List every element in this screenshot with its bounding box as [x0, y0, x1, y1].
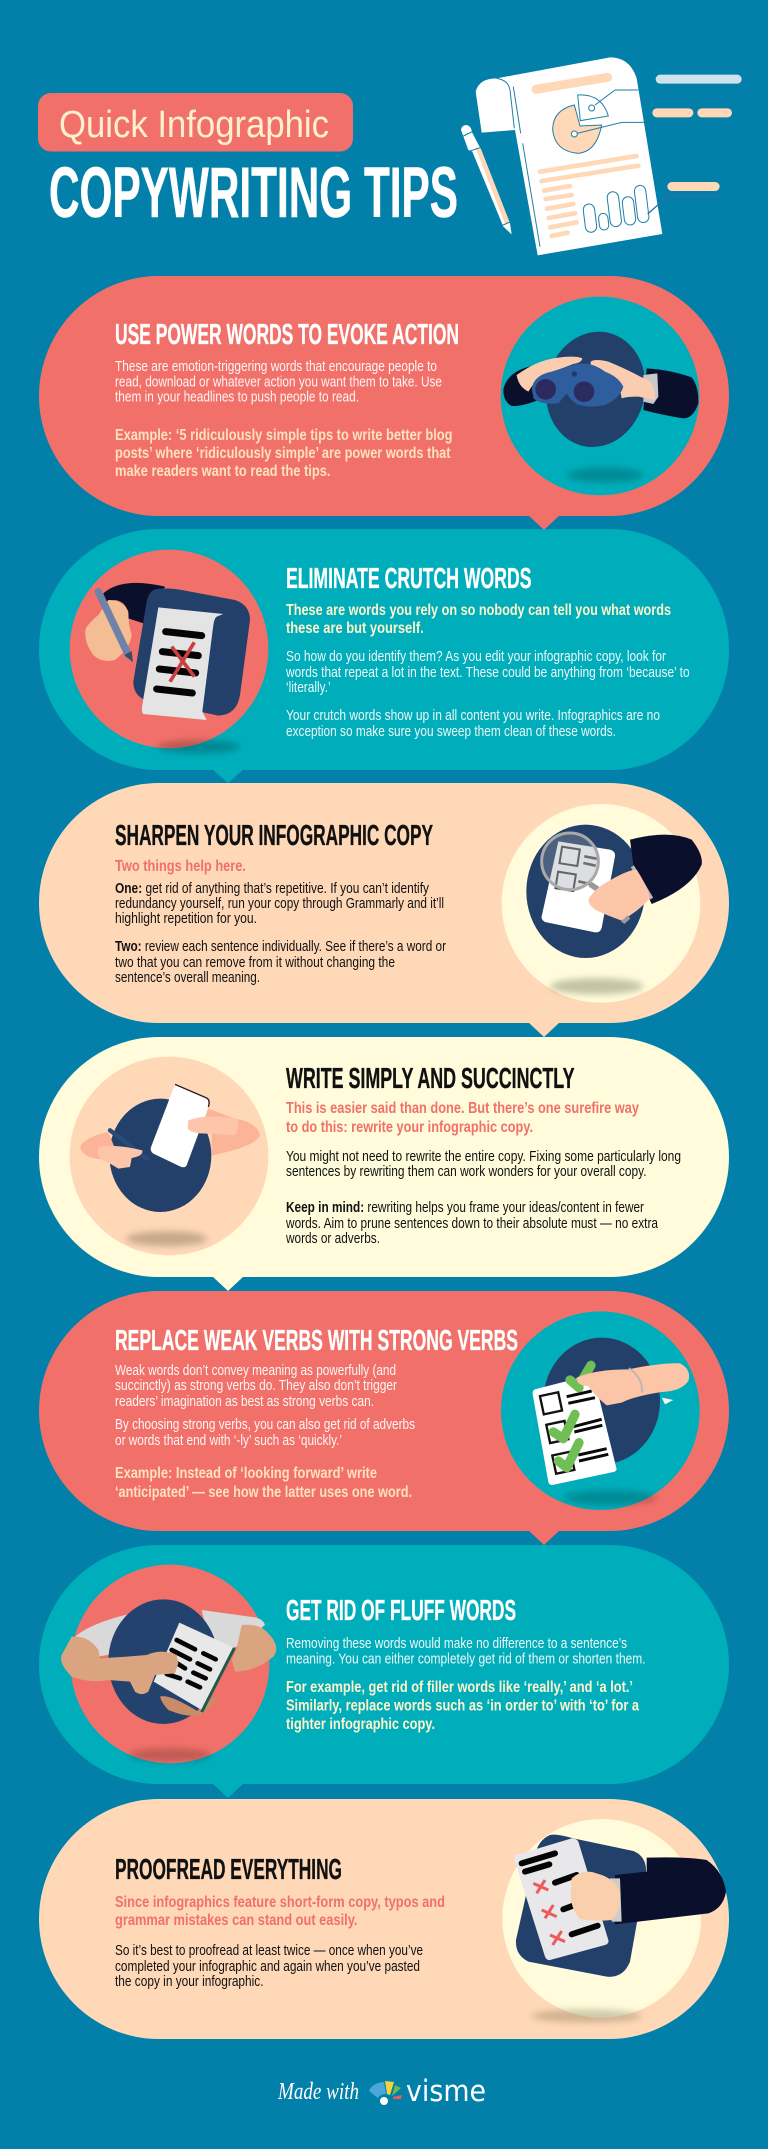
body text	[115, 1363, 415, 1449]
title pill: Quick Infographic	[38, 93, 353, 152]
body text: succinctly) as strong verbs do. They also don’t trigger	[115, 1378, 397, 1394]
body text	[285, 649, 690, 740]
heading: GET RID OF FLUFF WORDS	[286, 1595, 516, 1627]
highlight text: tighter infographic copy.	[286, 1716, 435, 1733]
body text: words. Aim to prune sentences down to their absolute must — no extra	[285, 1216, 659, 1232]
body text: ‘literally.’	[286, 680, 331, 696]
highlight text: Since infographics feature short-form copy, typos and	[115, 1894, 445, 1911]
panel 2: crutch words	[39, 529, 729, 783]
highlight text	[286, 1679, 639, 1733]
floating label bars	[652, 75, 742, 191]
illustration: hand crossing out list	[70, 550, 268, 753]
title: Copywriting Tips: COPYWRITING TIPS	[49, 154, 458, 233]
panel 1: power words	[39, 276, 729, 530]
body text: You might not need to rewrite the entire copy. Fixing some particularly long	[286, 1149, 681, 1165]
illustration: binoculars	[501, 297, 699, 495]
example text	[115, 1465, 412, 1501]
body text: the copy in your infographic.	[115, 1974, 264, 1990]
bar chart outline	[583, 185, 650, 233]
panel 7: proofread	[39, 1799, 729, 2039]
body text: words that repeat a lot in the text. These could be anything from ‘because’ to	[285, 665, 690, 681]
body text: read, download or whatever action you want them to take. Use	[115, 374, 442, 390]
illustration: hand holding review sheet	[502, 1819, 726, 2023]
body text: So it’s best to proofread at least twice — once when you’ve	[115, 1943, 423, 1959]
body text	[286, 1636, 646, 1668]
body text: exception so make sure you sweep them clean of these words.	[286, 724, 616, 740]
body text: Keep in mind: rewriting helps you frame your ideas/content in fewer	[286, 1200, 644, 1216]
body text: sentence’s overall meaning.	[115, 970, 260, 986]
footer: Made with Visme	[277, 2074, 486, 2108]
body text	[115, 1943, 423, 1990]
highlight text: Similarly, replace words such as ‘in order to’ with ‘to’ for a	[286, 1698, 639, 1714]
heading: SHARPEN YOUR INFOGRAPHIC COPY	[115, 820, 433, 852]
paper text lines	[536, 77, 638, 236]
heading: REPLACE WEAK VERBS WITH STRONG VERBS	[115, 1325, 518, 1357]
body text: Weak words don’t convey meaning as powerfully (and	[115, 1363, 396, 1379]
highlight text: For example, get rid of filler words like ‘really,’ and ‘a lot.’	[286, 1679, 633, 1696]
body text: meaning. You can either completely get rid of them or shorten them.	[286, 1652, 646, 1668]
header: title block	[38, 93, 458, 233]
example text: Example: ‘5 ridiculously simple tips to write better blog	[115, 427, 452, 444]
example text: make readers want to read the tips.	[115, 463, 330, 480]
body text: Your crutch words show up in all content you write. Infographics are no	[286, 708, 660, 724]
highlight text: grammar mistakes can stand out easily.	[115, 1912, 358, 1929]
panel 5: strong verbs	[39, 1291, 729, 1545]
body text: two that you can remove from it without changing the	[115, 955, 395, 971]
panel 3: sharpen copy	[39, 783, 729, 1037]
body text: completed your infographic and again when you’ve pasted	[115, 1959, 420, 1975]
body text: So how do you identify them? As you edit your infographic copy, look for	[286, 649, 666, 665]
pie chart	[553, 90, 644, 153]
body text: or words that end with ‘-ly’ such as ‘quickly.’	[115, 1433, 342, 1449]
body text	[285, 1149, 681, 1247]
highlight text: These are words you rely on so nobody can tell you what words	[286, 602, 671, 619]
example text: Example: Instead of ‘looking forward’ write	[115, 1465, 377, 1482]
illustration: hands with phone and pen	[70, 1057, 268, 1255]
body text: One: get rid of anything that’s repetitive. If you can’t identify	[115, 881, 430, 897]
body text: These are emotion-triggering words that encourage people to	[115, 359, 437, 375]
panel 6: fluff words	[39, 1545, 729, 1798]
title pill: Quick Infographic: Quick Infographic	[59, 104, 329, 146]
highlight text: Two things help here.	[115, 858, 246, 875]
example text: posts’ where ‘ridiculously simple’ are power words that	[115, 445, 451, 462]
body text: readers’ imagination as best as strong verbs can.	[115, 1394, 374, 1410]
panel 4: write simply	[39, 1037, 729, 1291]
illustration: checklist and hand	[501, 1311, 700, 1510]
body text: redundancy yourself, run your copy through Grammarly and it’ll	[115, 896, 444, 912]
body text: words or adverbs.	[285, 1231, 380, 1247]
icon: visme logo	[369, 2081, 402, 2105]
body text: them in your headlines to push people to read.	[115, 390, 359, 406]
highlight text: to do this: rewrite your infographic copy.	[286, 1119, 533, 1136]
body text: sentences by rewriting them can work wonders for your overall copy.	[286, 1164, 646, 1180]
wordmark: visme	[406, 2074, 486, 2108]
highlight text: This is easier said than done. But there’s one surefire way	[286, 1100, 639, 1117]
highlight text: these are but yourself.	[286, 620, 424, 637]
heading: USE POWER WORDS TO EVOKE ACTION	[115, 319, 459, 351]
icon: document with charts and pen	[461, 57, 742, 255]
illustration: hands holding book	[61, 1565, 276, 1763]
heading: PROOFREAD EVERYTHING	[115, 1854, 342, 1886]
highlight text	[115, 1894, 445, 1929]
heading: WRITE SIMPLY AND SUCCINCTLY	[286, 1063, 574, 1095]
pen	[461, 125, 512, 234]
highlight text	[286, 1100, 639, 1136]
body text	[115, 881, 446, 986]
example text: ‘anticipated’ — see how the latter uses one word.	[115, 1484, 412, 1501]
example text	[115, 427, 452, 480]
heading: ELIMINATE CRUTCH WORDS	[286, 563, 532, 595]
body text: highlight repetition for you.	[115, 911, 257, 927]
body text: Two: review each sentence individually. See if there’s a word or	[115, 939, 446, 955]
script label: Made with	[277, 2079, 359, 2105]
body text: Removing these words would make no difference to a sentence’s	[286, 1636, 627, 1652]
body text: By choosing strong verbs, you can also get rid of adverbs	[115, 1417, 415, 1433]
paper scroll	[476, 57, 662, 255]
body text	[115, 359, 442, 406]
highlight text	[286, 602, 671, 637]
illustration: magnifier over document	[502, 804, 702, 1003]
